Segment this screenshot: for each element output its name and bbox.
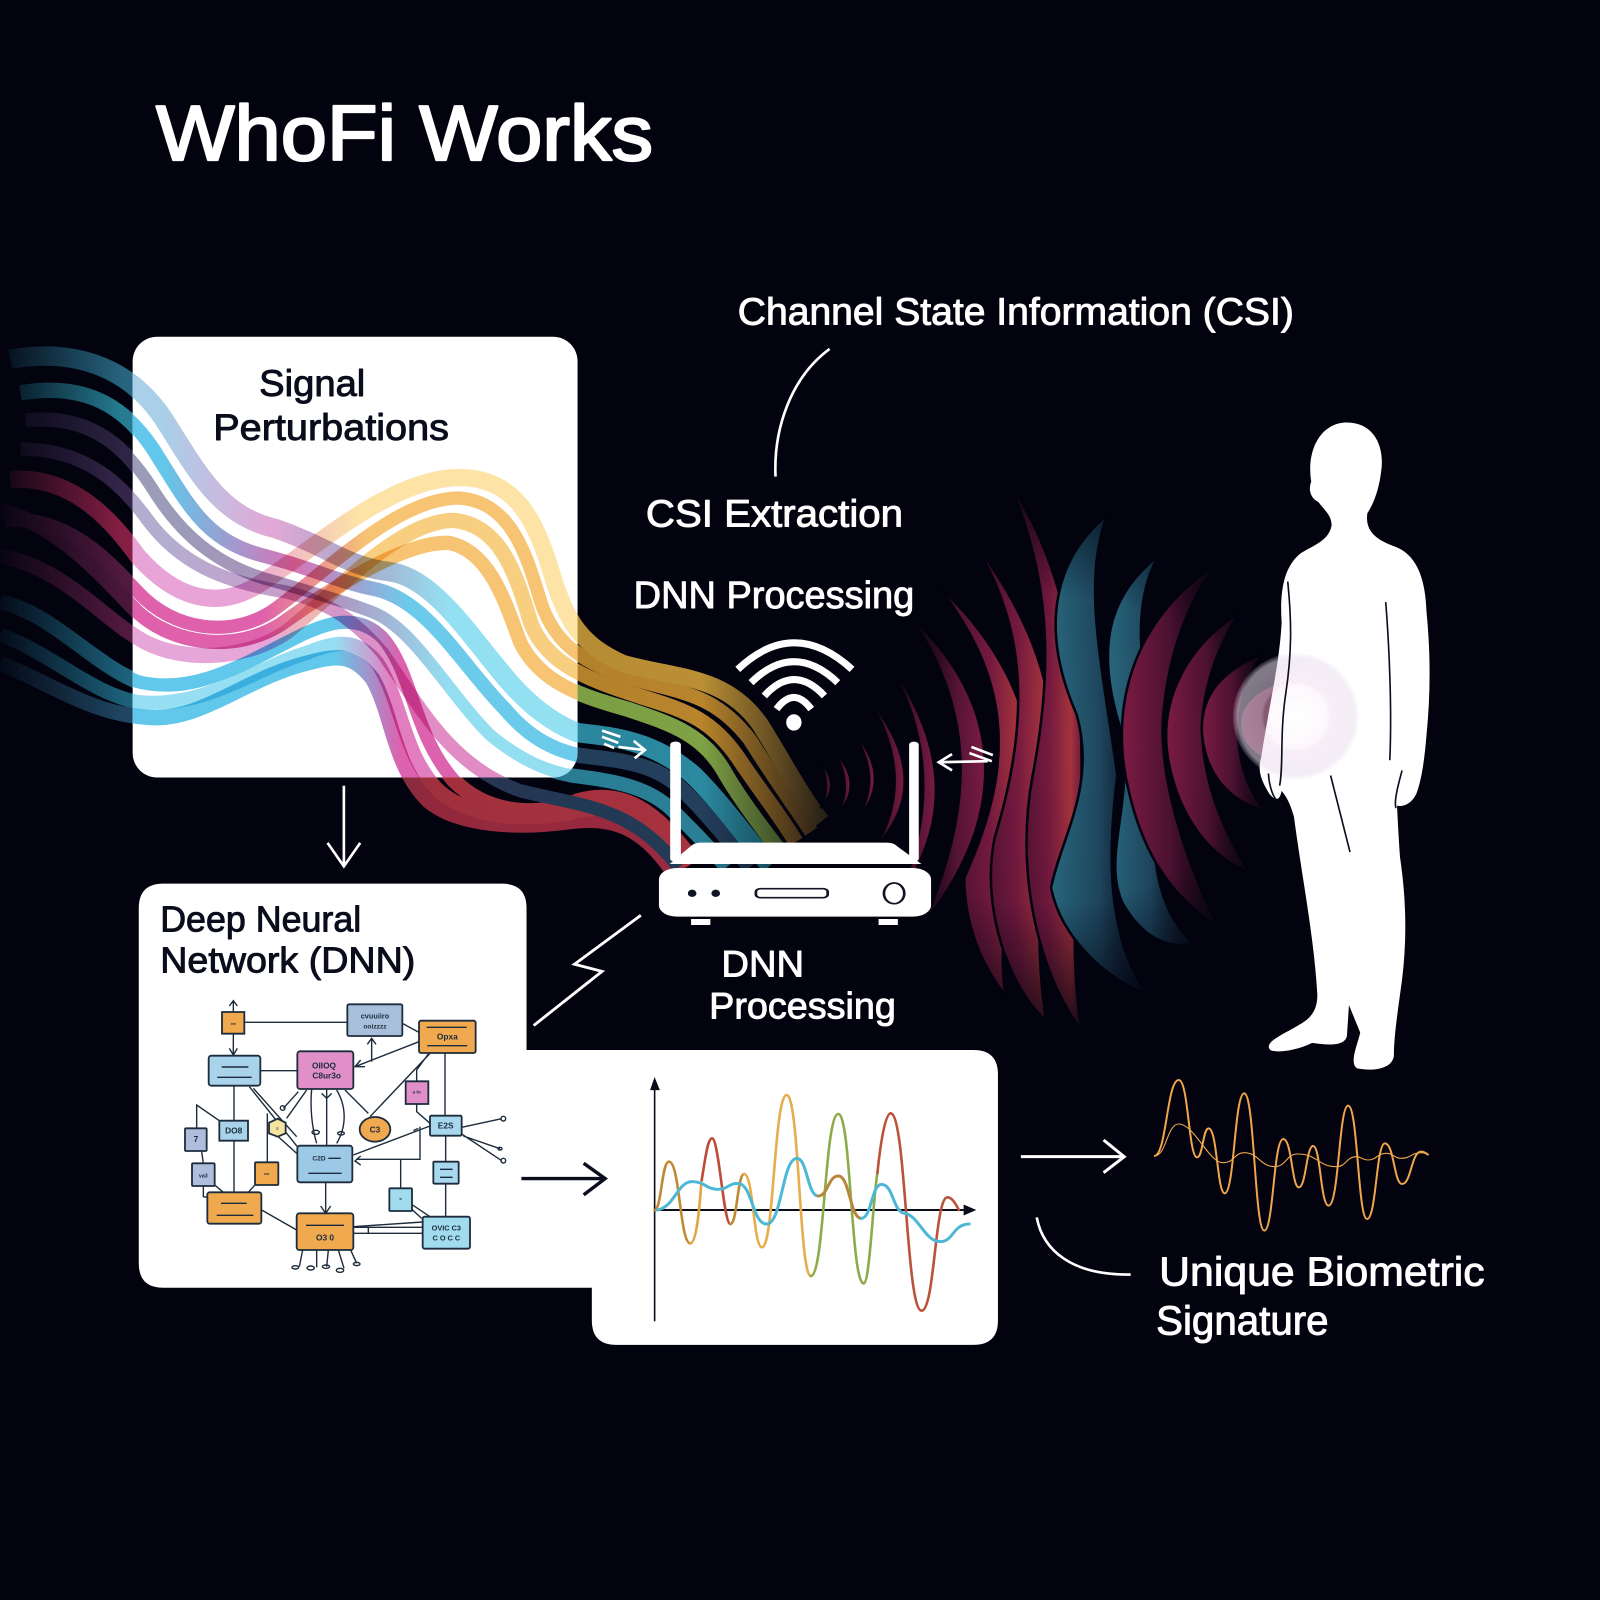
orange small node (222, 1012, 244, 1034)
curved connector from CSI label (775, 349, 830, 477)
orange bottom node (297, 1213, 353, 1250)
central blue node: C2D (312, 1156, 326, 1163)
orange wide node (207, 1192, 261, 1224)
label: DNN processing lower (709, 944, 896, 1026)
orange bottom node: O3 0 (316, 1232, 334, 1242)
light blue label node: E2S (438, 1121, 454, 1131)
label: unique biometric signature (1156, 1249, 1485, 1344)
central blue node (297, 1146, 352, 1182)
pink node (297, 1051, 353, 1089)
title: WhoFi Works (156, 91, 653, 177)
label: CSI extraction: CSI Extraction (646, 493, 903, 535)
network diagram (185, 1001, 506, 1272)
router top (670, 843, 921, 864)
cyan label node: C O C C (432, 1233, 461, 1242)
blue grey node (347, 1004, 402, 1036)
terminal dots (280, 1106, 506, 1272)
router indicators (688, 890, 720, 897)
sonic waves between router and person (818, 485, 1284, 1031)
panel heading: Perturbations (213, 407, 449, 448)
light blue node (209, 1056, 260, 1086)
arrow: panel down to DNN (328, 786, 360, 866)
label: DNN processing lower: Processing (709, 985, 896, 1026)
panel: deep neural network (160, 900, 506, 1272)
icon: router (659, 742, 931, 925)
router button (884, 883, 904, 904)
small pink node: a to (413, 1089, 421, 1094)
connector curve to signature label (1037, 1217, 1131, 1275)
cyan small node (389, 1188, 412, 1211)
small blue node (219, 1121, 248, 1141)
router slot (756, 889, 828, 898)
label: channel state information: Channel State Information (CSI) (738, 290, 1294, 332)
icon: wifi (738, 643, 852, 731)
heading: Network (DNN) (160, 940, 415, 980)
chart: unique biometric signature (1154, 1080, 1428, 1231)
thin signature line (1154, 1124, 1428, 1167)
small pink node (406, 1081, 428, 1104)
cyan signal (658, 1158, 969, 1242)
panel heading: Signal (259, 363, 365, 404)
pink node: OIIOQ (312, 1061, 337, 1071)
connections (197, 1001, 502, 1268)
arrow: right signal into router (939, 747, 993, 770)
pink node: C8ur3o (312, 1071, 341, 1081)
cyan label node: OVIC C3 (432, 1223, 461, 1232)
grey small node (192, 1163, 215, 1186)
chart: processed waveforms (651, 1079, 974, 1321)
signal ribbons outside the panels (0, 356, 821, 872)
orange top right node: Opxa (437, 1032, 458, 1042)
yellow node (269, 1119, 286, 1137)
infographic canvas (0, 102, 1484, 1345)
horizontal axis (655, 1206, 974, 1214)
panel: signal perturbations (132, 336, 578, 778)
panel heading (213, 363, 449, 448)
router body (659, 868, 931, 917)
blue grey node: cvuuiiro (361, 1012, 390, 1021)
grey small node: va3 (199, 1173, 208, 1179)
heading (160, 900, 415, 980)
router feet (691, 919, 898, 925)
heading: Deep Neural (160, 900, 361, 940)
label: DNN processing lower: DNN (721, 944, 804, 985)
arrow: lightning connector (534, 915, 641, 1026)
grey node: 7 (194, 1134, 199, 1144)
icon: person silhouette (1233, 422, 1430, 1070)
label: DNN processing upper: DNN Processing (634, 574, 914, 616)
orange oval node: C3 (370, 1124, 381, 1134)
arrow: left signal into router (602, 731, 645, 758)
blue stacked node (433, 1162, 459, 1184)
body contour lines (1268, 582, 1402, 852)
cyan small node: ≡ (399, 1197, 402, 1202)
vertical axis (651, 1079, 659, 1321)
cyan label node (423, 1217, 470, 1249)
blue grey node: ooizzzz (363, 1024, 387, 1031)
label: unique biometric signature: Unique Biometric (1159, 1249, 1485, 1295)
arrow: DNN to chart (521, 1163, 605, 1195)
arrow: chart to signature (1021, 1140, 1124, 1173)
small blue node: DO8 (225, 1126, 243, 1136)
multi-colour signal (655, 1095, 959, 1311)
grey node (185, 1128, 207, 1151)
orange oval node (360, 1117, 390, 1142)
light blue label node (430, 1116, 462, 1136)
panel ribbons (132, 372, 578, 778)
orange small lower node: ≡≡ (264, 1171, 270, 1176)
connected white panels (139, 884, 998, 1345)
orange small node: ≡≡ (231, 1021, 236, 1026)
glow on body (1233, 653, 1359, 780)
label: unique biometric signature: Signature (1156, 1298, 1329, 1344)
antenna left (670, 742, 681, 862)
main signature line (1154, 1080, 1428, 1231)
orange small lower node (255, 1162, 278, 1185)
orange top right node (419, 1021, 476, 1053)
yellow node: ≡ (276, 1126, 279, 1131)
antenna right (909, 742, 919, 862)
